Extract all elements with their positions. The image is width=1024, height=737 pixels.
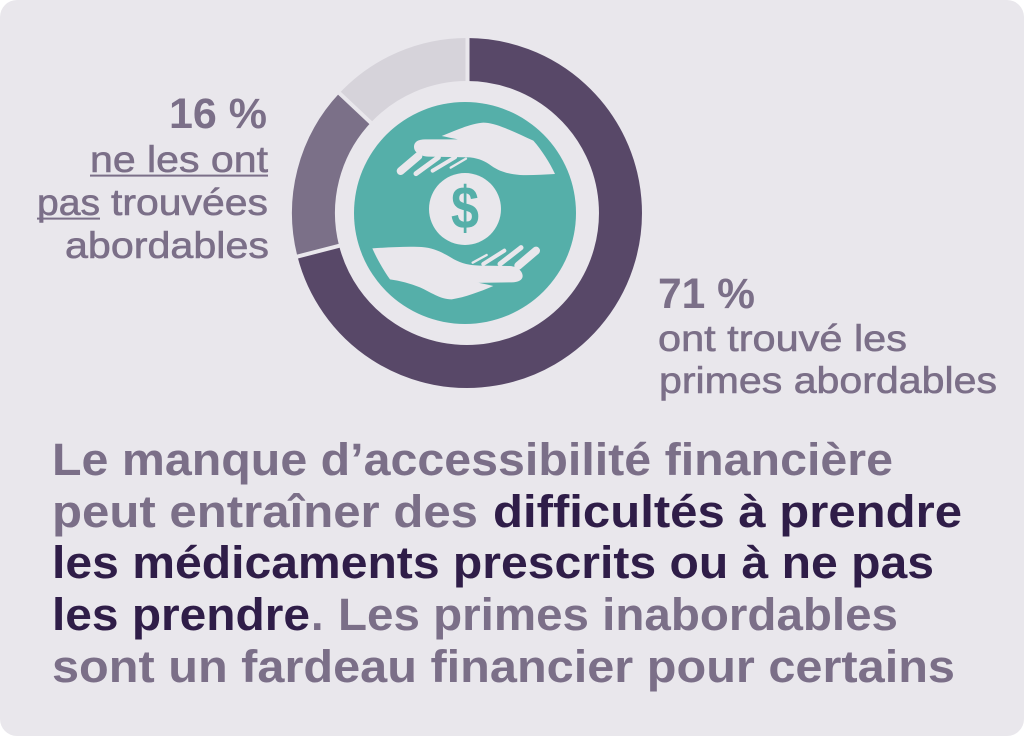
segment: 16 % xyxy=(313,108,355,251)
callout: 16 % xyxy=(37,90,269,266)
label: ne les ont pas trouvées abordables: abordables xyxy=(65,225,269,266)
stat: 16 %: 16 % xyxy=(169,90,267,138)
label: ne les ont pas trouvées abordables: ne les ont xyxy=(90,139,269,180)
icon: teal disc xyxy=(354,102,576,324)
donut chart xyxy=(293,30,620,366)
text block: conclusion: Les primes inabordables xyxy=(338,589,898,640)
callout: 71 % xyxy=(658,270,997,401)
text block: conclusion: difficultés à prendre xyxy=(493,486,962,537)
icon: top hand xyxy=(401,123,555,175)
text block: conclusion: peut entraîner des xyxy=(52,486,478,537)
label: ne les ont pas trouvées abordables: pas xyxy=(37,182,100,223)
segment: remaining share xyxy=(355,59,467,108)
text block: conclusion: les prendre xyxy=(52,589,310,640)
text block: conclusion: les médicaments prescrits ou à ne pas xyxy=(52,537,934,588)
icon: dollar sign: $ xyxy=(451,174,479,242)
text block: conclusion: . xyxy=(311,589,324,640)
text block: conclusion: Le manque d’accessibilité financière xyxy=(52,434,893,485)
label: ont trouvé les primes abordables: primes abordables xyxy=(659,360,997,401)
label: ne les ont pas trouvées abordables xyxy=(37,139,269,266)
label: ont trouvé les primes abordables: ont trouvé les xyxy=(658,318,907,359)
label: ont trouvé les primes abordables xyxy=(658,318,997,401)
text block: conclusion: sont un fardeau financier pour certains xyxy=(52,641,955,692)
segment: 71 % xyxy=(318,60,620,366)
icon: coin xyxy=(429,173,501,245)
text block: conclusion xyxy=(52,434,962,692)
icon: hands protecting a dollar coin xyxy=(354,102,576,324)
label: ne les ont pas trouvées abordables: trouvées xyxy=(111,182,268,223)
stat: 71 %: 71 % xyxy=(658,270,755,318)
icon: bottom hand xyxy=(372,247,536,299)
